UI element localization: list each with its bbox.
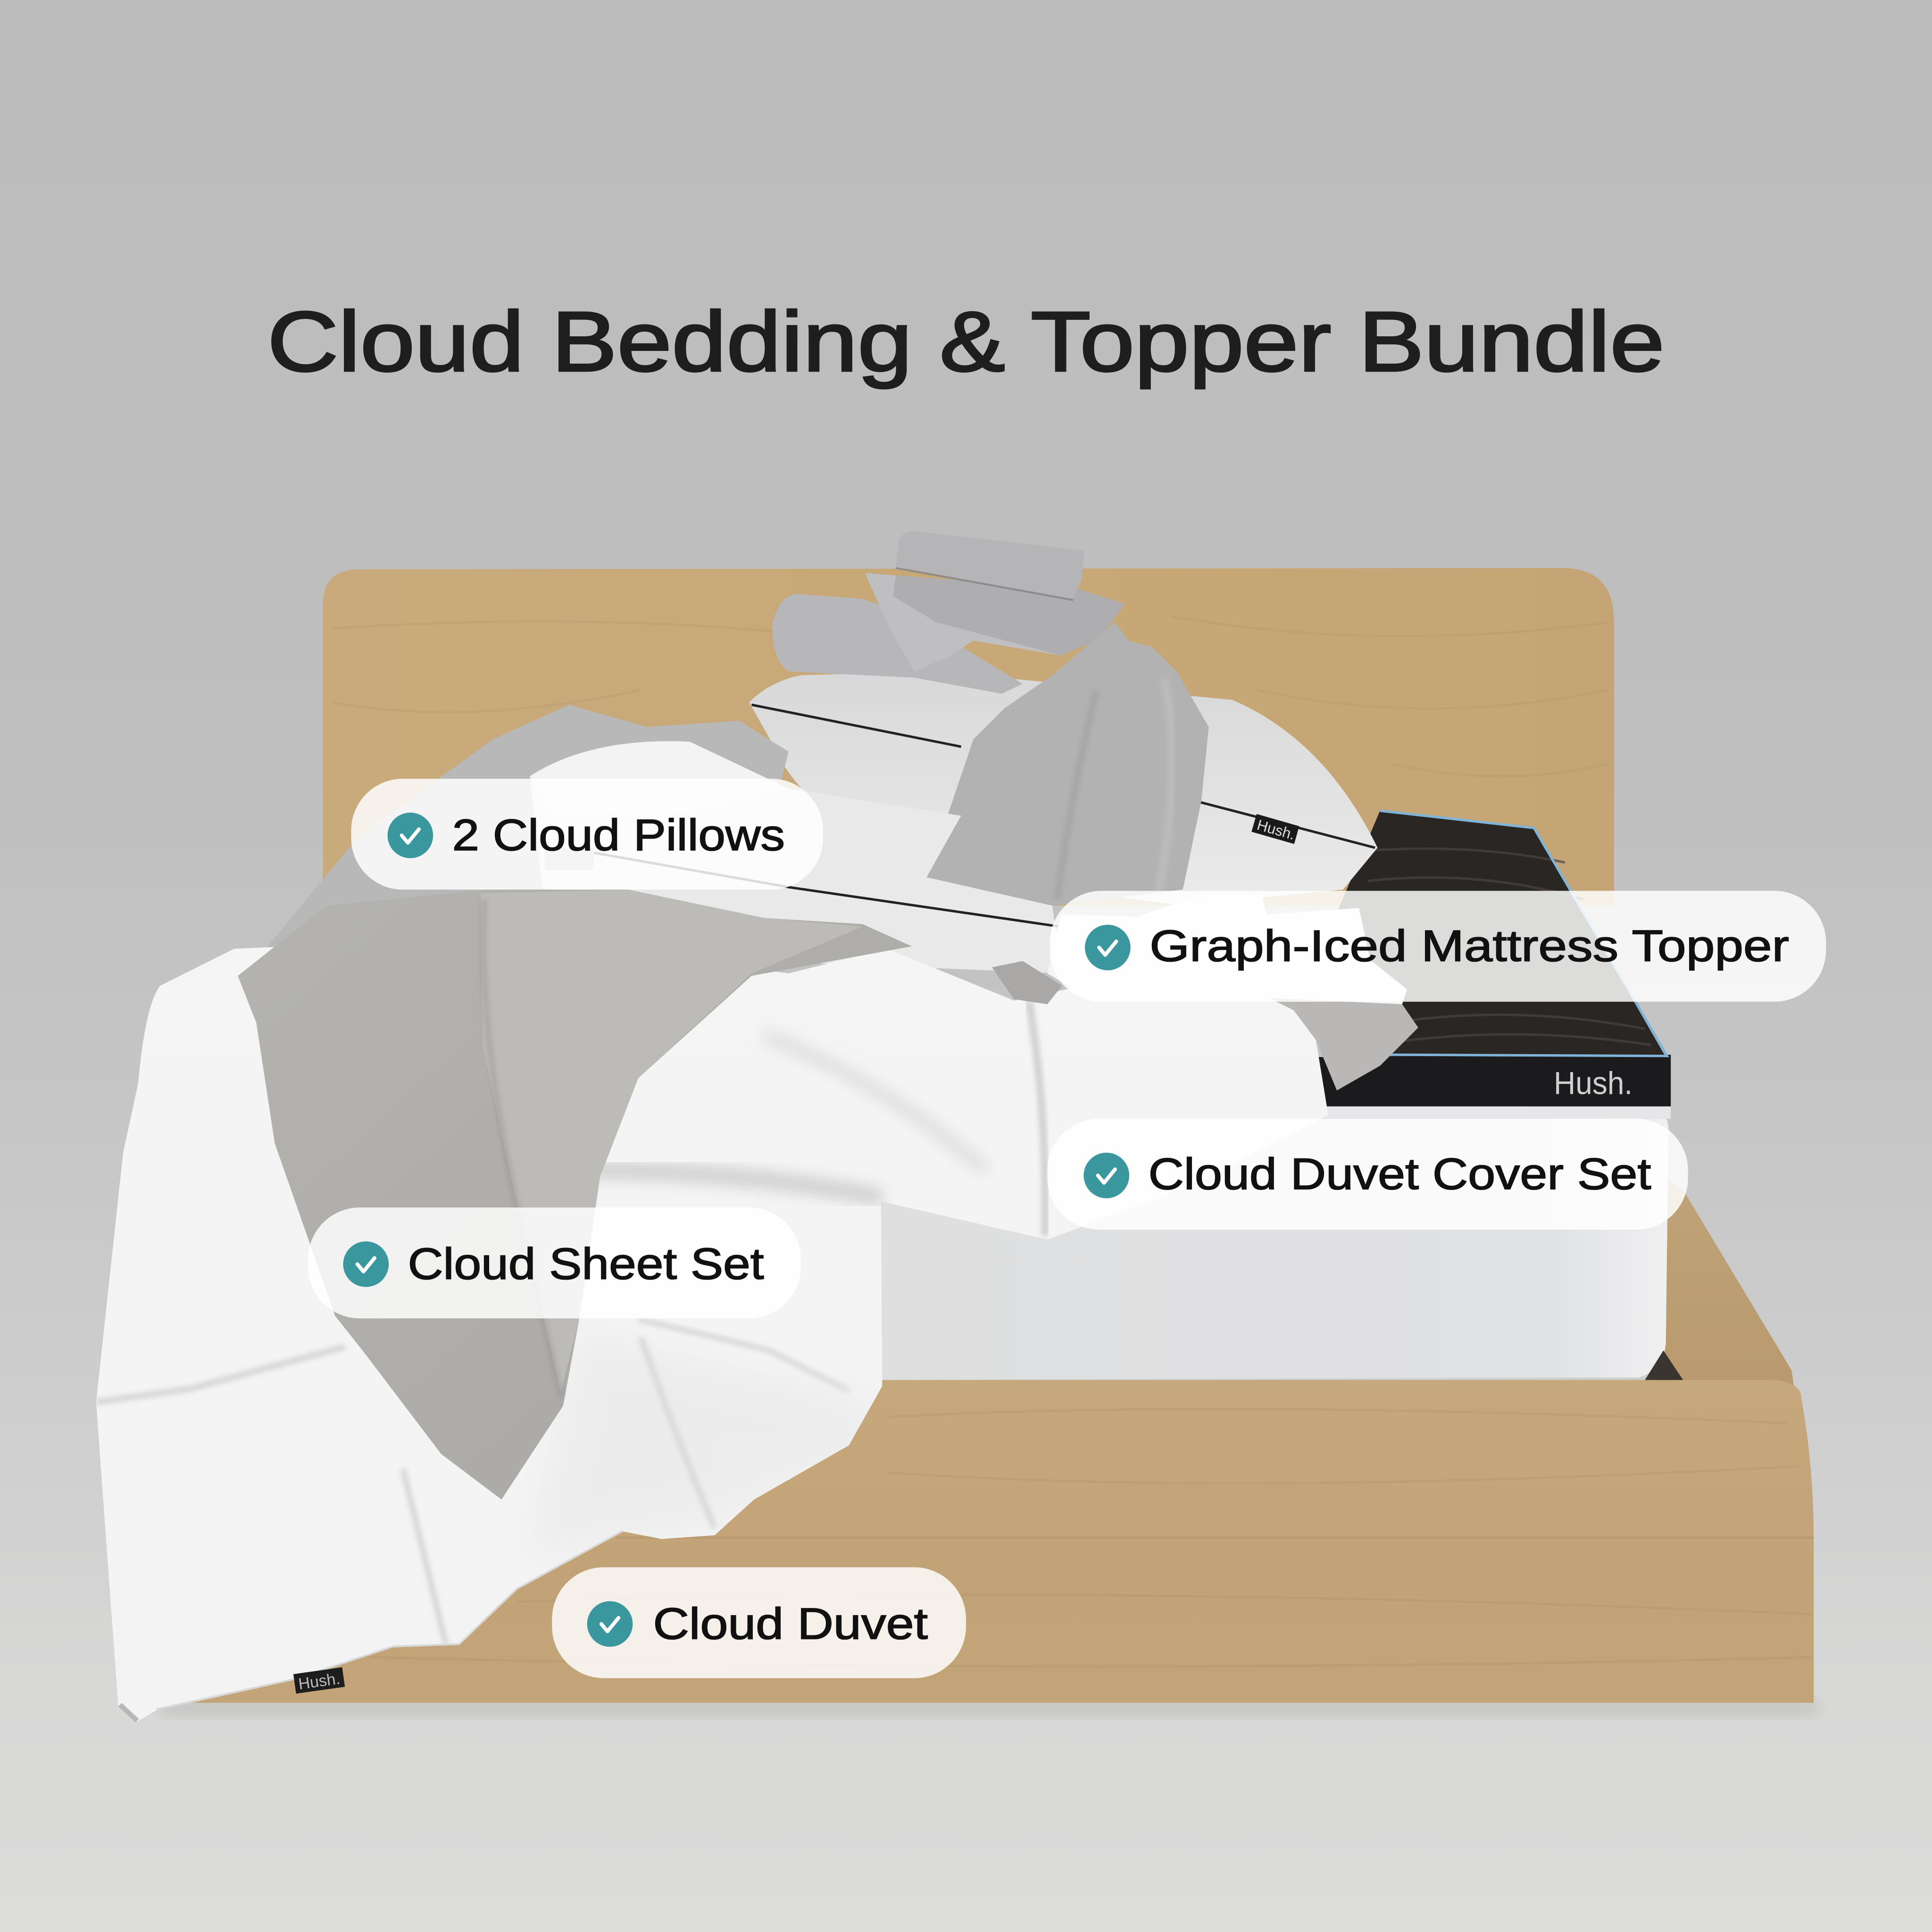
topper piping — [1380, 811, 1667, 1056]
draped sheet body — [926, 622, 1209, 906]
duvet body — [96, 936, 1328, 1723]
callout: Cloud Duvet Cover Set — [1047, 1119, 1688, 1230]
label: Graph-Iced Mattress Topper — [1149, 921, 1789, 971]
front pillow body — [530, 741, 1062, 974]
pill background — [552, 1567, 966, 1678]
mattress corner gap — [1645, 1350, 1683, 1380]
fitted sheet left gather — [992, 961, 1062, 1004]
front pillow top highlight — [530, 741, 789, 813]
pillow tag: Hush. — [1255, 816, 1297, 843]
bed base front — [185, 1380, 1814, 1703]
callout: Cloud Duvet — [552, 1567, 966, 1678]
topper front side — [1306, 1055, 1671, 1107]
headboard — [323, 568, 1614, 906]
fitted sheet — [992, 893, 1418, 1091]
front pillow piping — [579, 850, 1060, 926]
folded sheet crease — [896, 568, 1073, 600]
rear pillow body — [749, 672, 1377, 906]
front pillow tag — [545, 848, 594, 870]
mattress — [863, 1103, 1669, 1380]
floor shadow — [160, 1700, 1817, 1715]
side rail — [1651, 1171, 1794, 1386]
icon: check badge — [1085, 924, 1131, 970]
folded sheet middle — [893, 575, 1125, 656]
pill background — [1050, 891, 1826, 1002]
front pillow — [530, 741, 1062, 974]
draped sheet folds — [1057, 690, 1097, 899]
flat sheet light fold — [481, 890, 863, 1392]
base panel seam — [616, 1537, 1814, 1538]
topper top surface — [1306, 811, 1666, 1057]
label: Cloud Duvet Cover Set — [1149, 1149, 1651, 1199]
rear pillow piping — [751, 705, 1375, 848]
callout: Graph-Iced Mattress Topper — [1050, 891, 1826, 1002]
wood grain — [333, 616, 1608, 776]
label: Cloud Sheet Set — [408, 1239, 764, 1289]
topper quilting — [1368, 849, 1651, 1045]
callout: 2 Cloud Pillows — [351, 779, 823, 890]
callout: Cloud Sheet Set — [308, 1208, 801, 1318]
rear pillow — [749, 672, 1377, 906]
white duvet — [96, 936, 1328, 1723]
flat sheet body — [238, 890, 912, 1499]
label: 2 Cloud Pillows — [452, 810, 785, 859]
icon: check badge — [587, 1601, 633, 1647]
icon: check badge — [343, 1241, 389, 1287]
pill background — [1047, 1119, 1688, 1230]
folded sheet top — [896, 531, 1084, 599]
pill background — [351, 779, 823, 890]
pill background — [308, 1208, 801, 1318]
topper logo: Hush. — [1554, 1066, 1632, 1101]
duvet tag: Hush. — [297, 1670, 341, 1693]
topper base foam — [1324, 1107, 1671, 1119]
mattress topper — [1306, 811, 1671, 1119]
folded pillowcase roll — [773, 594, 1023, 694]
fitted sheet gray corner — [1269, 998, 1418, 1091]
icon: check badge — [1083, 1153, 1129, 1198]
label: Cloud Duvet — [653, 1599, 928, 1648]
folded sheet flap — [865, 573, 1061, 672]
title: Cloud Bedding & Topper Bundle — [267, 294, 1665, 389]
icon: check badge — [388, 813, 433, 858]
base grain — [370, 1409, 1811, 1666]
gray flat sheet — [238, 890, 912, 1499]
flat sheet inner shadow — [483, 899, 562, 1399]
duvet shading folds — [96, 1000, 1045, 1723]
fitted sheet white top — [1047, 893, 1407, 1010]
draped sheet over pillows — [926, 622, 1209, 906]
bed illustration — [96, 531, 1814, 1723]
gray sheet behind front pillow — [240, 705, 789, 980]
